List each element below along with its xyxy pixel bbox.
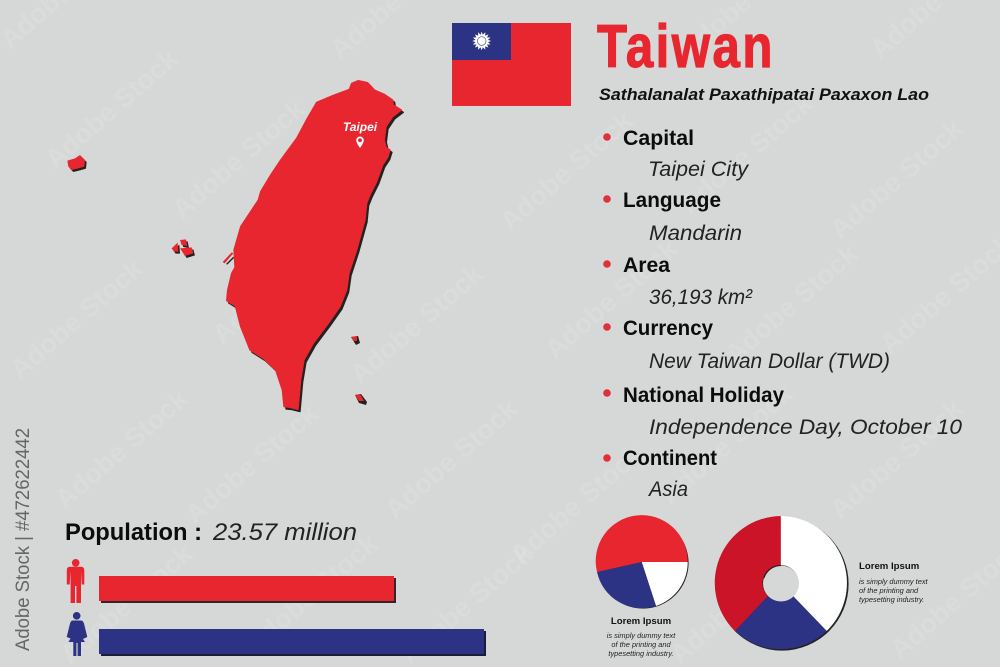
map of Taiwan: [67, 81, 403, 412]
islands: southeast: [351, 336, 367, 405]
stock credit: Adobe Stock | #472622442: [13, 428, 34, 651]
text: Adobe Stock: [344, 258, 489, 390]
text: Adobe Stock: [664, 538, 809, 667]
population bar chart: [67, 559, 486, 656]
text: Adobe Stock: [49, 383, 194, 515]
fact: continent: Continent: [623, 447, 717, 470]
fact: national holiday: [603, 384, 962, 439]
text: Adobe Stock: [166, 93, 311, 225]
text: Adobe Stock: [494, 105, 639, 237]
capital label: Taipei: [343, 120, 378, 148]
fact: capital: Capital: [623, 127, 694, 150]
text: Adobe Stock: [504, 438, 649, 570]
island: Penghu: [67, 155, 195, 258]
main island: [223, 81, 403, 412]
text: Adobe Stock: [654, 378, 799, 510]
fact: capital: [603, 127, 750, 181]
flag of Taiwan: [452, 23, 571, 106]
text: Adobe Stock: [824, 393, 969, 525]
pie caption: is simply dummy text: [607, 631, 676, 640]
pie caption: of the printing and: [611, 640, 671, 649]
pie caption: typesetting industry.: [608, 649, 674, 658]
pie caption: [607, 616, 676, 658]
text: Adobe Stock: [179, 398, 324, 530]
donut chart: [715, 516, 849, 651]
capital label: Taipei: Taipei: [343, 120, 378, 134]
pie caption: Lorem Ipsum: [611, 616, 671, 627]
fact: area: 36,193 km²: [649, 286, 753, 309]
female bar: [99, 629, 486, 656]
icon: male figure: [67, 559, 84, 603]
fact: continent: Asia: [647, 478, 688, 501]
fact: language: Language: [623, 189, 721, 212]
donut caption: typesetting industry.: [859, 595, 924, 604]
text: Adobe Stock: [719, 238, 864, 370]
text: Adobe Stock: [379, 393, 524, 525]
fact: continent: [603, 447, 717, 501]
text: Adobe Stock: [239, 528, 384, 660]
donut caption: [859, 561, 929, 604]
text: Adobe Stock: [674, 88, 819, 220]
text: Adobe Stock: [539, 233, 684, 365]
icon: map pin: [356, 136, 364, 148]
donut caption: of the printing and: [859, 586, 919, 595]
fact: national holiday: National Holiday: [623, 384, 784, 407]
donut caption: is simply dummy text: [859, 577, 929, 586]
icon: white sun: [472, 32, 491, 50]
text: Adobe Stock: [824, 113, 969, 245]
fact: area: Area: [623, 254, 670, 277]
pie chart: [596, 515, 689, 609]
donut caption: Lorem Ipsum: [859, 561, 919, 572]
fact: area: [603, 254, 753, 309]
text: Adobe Stock: [54, 538, 199, 667]
population heading: Population :: [65, 519, 202, 546]
fact: language: Mandarin: [649, 222, 742, 245]
fact: capital: Taipei City: [648, 158, 750, 181]
text: Adobe Stock: [394, 538, 539, 667]
text: Adobe Stock: [4, 253, 149, 385]
fact: currency: [603, 317, 890, 373]
fact list: [603, 127, 962, 501]
population heading: 23.57 million: [212, 519, 357, 546]
fact: currency: New Taiwan Dollar (TWD): [649, 350, 890, 373]
icon: female figure: [67, 612, 87, 656]
fact: national holiday: Independence Day, October 10: [649, 416, 962, 439]
population heading: [65, 519, 357, 546]
text: Adobe Stock: [39, 43, 184, 175]
subtitle: Sathalanalat Paxathipatai Paxaxon Lao: [599, 86, 929, 104]
male bar: [99, 576, 396, 603]
title: Taiwan: [597, 12, 775, 80]
fact: currency: Currency: [623, 317, 713, 340]
fact: language: [603, 189, 742, 245]
text: Adobe Stock: [206, 218, 351, 350]
